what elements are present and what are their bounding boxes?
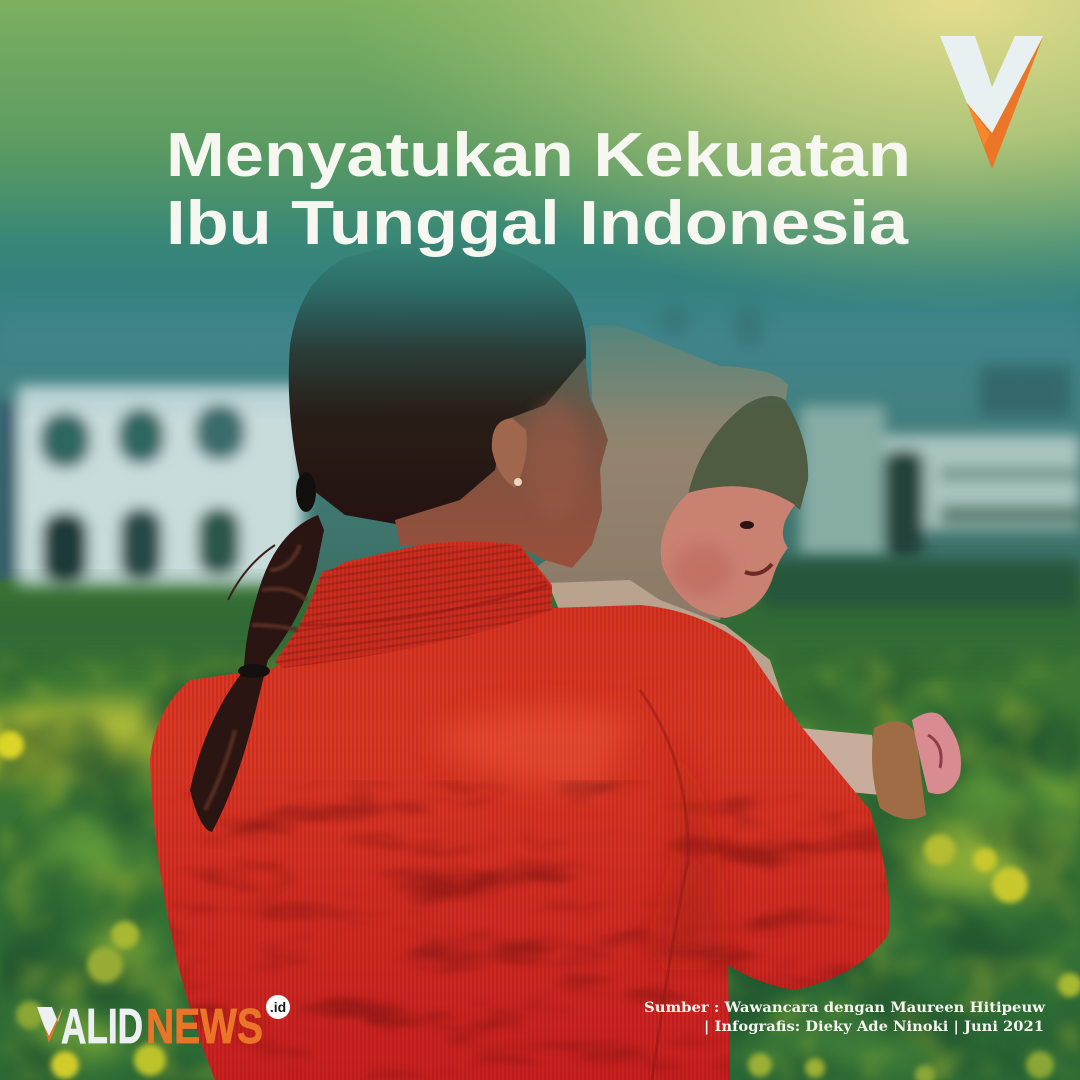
braid [190, 515, 324, 832]
flower field [0, 699, 1080, 1074]
baby collar [548, 580, 800, 725]
baby eye and mouth [740, 521, 772, 574]
mother face and neck [395, 358, 608, 568]
logo: Validnews.id bottom left: .id [270, 999, 286, 1015]
baby face [661, 486, 795, 618]
hedge [0, 590, 1080, 660]
source credit [644, 1000, 1046, 1035]
sky and upper backdrop [0, 0, 1080, 580]
blurred building [0, 290, 1080, 590]
mother head and hair [289, 235, 586, 530]
baby green hat [688, 396, 808, 510]
wordmark: ALID [61, 1000, 143, 1054]
sweater shading [150, 540, 895, 1080]
logo: Validnews.id bottom left: NEWS [146, 1000, 263, 1054]
title: Ibu Tunggal Indonesia [166, 189, 909, 258]
source credit: | Infografis: Dieky Ade Ninoki | Juni 2021 [704, 1019, 1044, 1035]
baby hood [535, 325, 788, 620]
baby arm and sleeve [760, 680, 961, 819]
top colour gradient wash [0, 0, 1080, 420]
source credit: Sumber : Wawancara dengan Maureen Hitipeuw [644, 1000, 1046, 1016]
.id badge [266, 995, 290, 1019]
title [166, 121, 911, 258]
sweater [150, 540, 895, 1080]
title: Menyatukan Kekuatan [166, 121, 911, 190]
photo: baby held by mother [150, 235, 961, 1080]
logo: V mark top right [940, 36, 1043, 169]
ear and earring [492, 418, 527, 488]
hair tie [296, 472, 316, 512]
logo: Validnews.id bottom left [37, 995, 290, 1054]
V mark [37, 1007, 63, 1043]
sweater collar [275, 544, 552, 668]
bokeh mottling [0, 640, 1080, 1080]
